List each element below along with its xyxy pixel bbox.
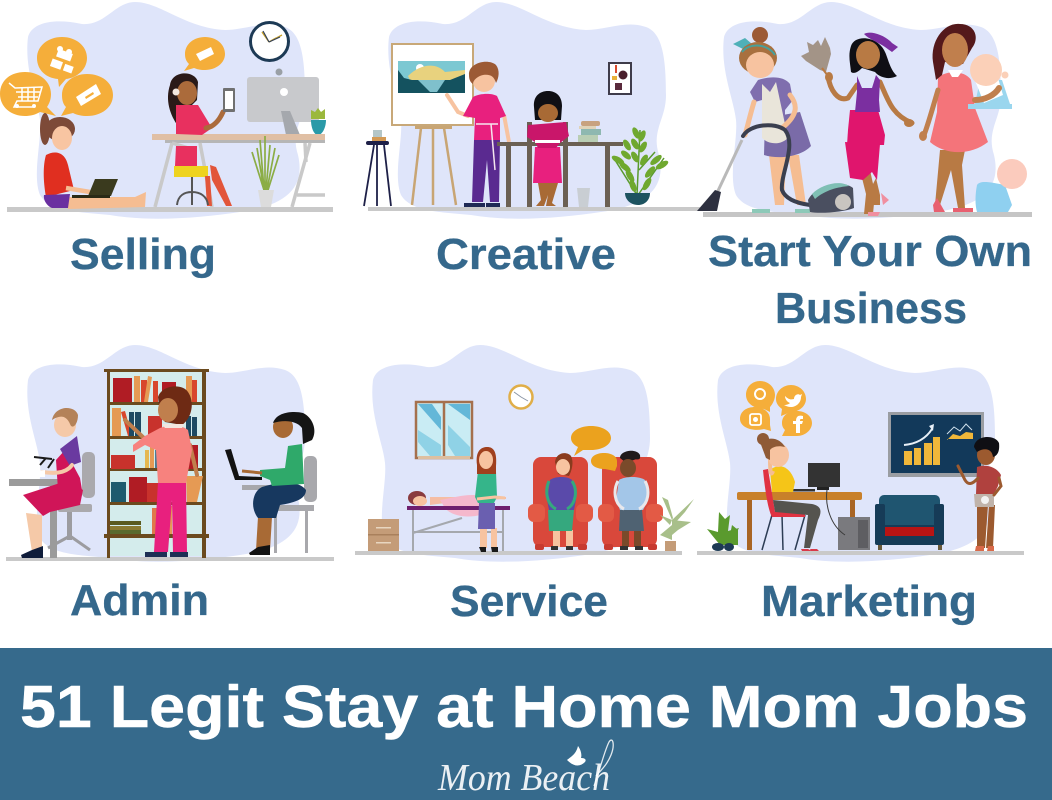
man painting (447, 62, 509, 207)
potted plant (610, 126, 670, 205)
butterfly mark (567, 746, 586, 766)
panel: creative (364, 2, 700, 219)
floor (368, 207, 700, 211)
floor (355, 551, 682, 555)
desk plant (707, 512, 739, 551)
background blob: service (372, 345, 650, 562)
title: 51 Legit Stay at Home Mom Jobs (20, 674, 1028, 740)
books (110, 376, 203, 534)
heading: start your own business: Start Your Own (708, 227, 1032, 276)
woman with duster (801, 33, 914, 216)
presenter woman (958, 437, 1001, 551)
desk with computer (737, 463, 870, 550)
heading: start your own business: Business (775, 284, 967, 333)
landscape painting (398, 61, 465, 93)
therapist (475, 447, 505, 552)
title banner (0, 648, 1052, 800)
seated woman writing (527, 91, 569, 207)
table (497, 142, 623, 207)
heading: creative: Creative (436, 230, 616, 279)
panel: selling (0, 2, 333, 219)
presentation board (888, 412, 984, 477)
social media bubbles (740, 381, 812, 436)
stool with cups (364, 130, 391, 206)
panel: marketing (697, 345, 1024, 562)
woman at bookcase (125, 386, 197, 557)
heading: service: Service (450, 577, 608, 626)
computer monitor (247, 68, 319, 135)
panel: admin (6, 345, 334, 562)
background blob: creative (388, 2, 666, 219)
background blob: admin (27, 345, 305, 562)
woman on floor with laptop (40, 113, 146, 209)
seated woman in green skirt (547, 453, 576, 550)
logo: Mom Beach: Mom Beach (437, 757, 610, 799)
desk (152, 134, 325, 207)
maid with vacuum (697, 27, 854, 213)
speech bubbles (571, 426, 617, 471)
drawer cabinet (368, 519, 399, 551)
heading: start your own business (708, 227, 1032, 333)
armchair (875, 495, 944, 550)
seated woman in blue top (615, 451, 648, 550)
speech bubbles with shopping icons (0, 37, 225, 116)
easel and canvas (392, 44, 473, 205)
logo: Mom Beach (437, 740, 613, 799)
wall clock (250, 22, 288, 60)
floor (7, 207, 333, 212)
panel: start your own business (697, 2, 1032, 219)
h ascender loop (594, 740, 613, 786)
stack of books (578, 121, 601, 142)
background blob: selling (27, 2, 305, 219)
mother with babies (919, 24, 1027, 212)
palm plant (660, 497, 694, 551)
woman with laptop (225, 412, 317, 555)
background blob: business (723, 2, 1001, 219)
floor (697, 551, 1024, 555)
small potted cactus (311, 108, 326, 135)
bookcase (104, 369, 209, 558)
floor (6, 557, 334, 561)
heading: selling: Selling (70, 230, 216, 279)
woman reading at desk (9, 408, 95, 558)
wastebasket (577, 188, 590, 207)
floor (703, 212, 1032, 217)
wall clock (510, 386, 532, 408)
massage table with patient (407, 491, 510, 551)
woman at desk on phone (168, 73, 235, 206)
bar chart (904, 437, 940, 465)
heading: admin: Admin (70, 576, 209, 625)
window (415, 401, 473, 459)
woman at desk on phone (757, 433, 820, 551)
background blob: marketing (717, 345, 995, 562)
heading: marketing: Marketing (761, 577, 977, 626)
wall picture (609, 63, 631, 94)
armchairs (528, 457, 663, 550)
panel: service (355, 345, 694, 562)
floor plant (252, 136, 279, 207)
